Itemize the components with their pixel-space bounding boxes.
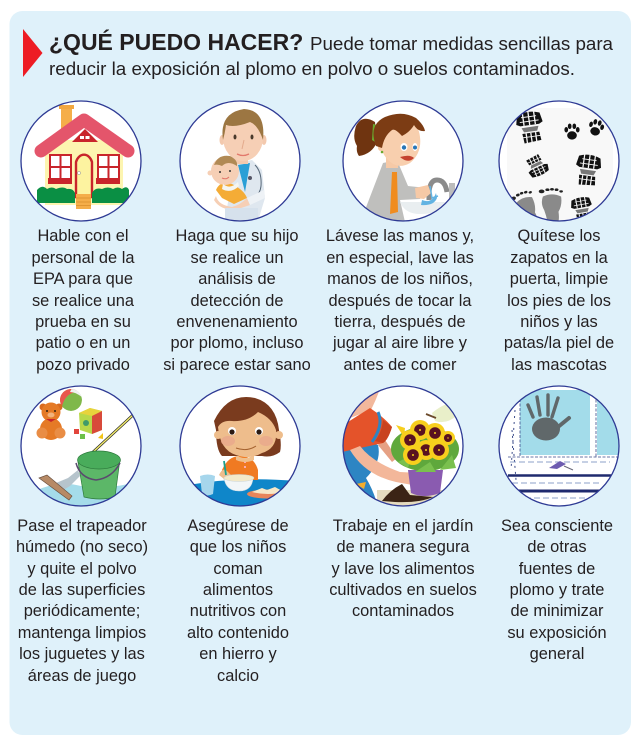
text: col 2 row 1: por plomo, incluso xyxy=(170,334,304,352)
intro text line 2: reducir la exposición al plomo en polvo o suelos contaminados. xyxy=(49,58,575,79)
icon: girl washing hands xyxy=(343,101,463,222)
text: col 3 row 1: jugar al aire libre y xyxy=(332,334,468,352)
text: col 3 row 1: manos de los niños, xyxy=(327,270,473,288)
text: col 4 row 2: su exposición xyxy=(507,624,607,642)
text: col 2 row 1: si parece estar sano xyxy=(163,356,311,374)
text: col 1 row 1: Hable con el xyxy=(37,227,129,245)
text: col 2 row 2: nutritivos con xyxy=(190,602,286,620)
text: col 3 row 2 xyxy=(329,517,477,620)
text: col 4 row 2: fuentes de xyxy=(519,560,595,578)
icon: toys, mop and bucket xyxy=(21,386,141,510)
text: col 1 row 2: periódicamente; xyxy=(24,602,140,620)
text: col 1 row 1 xyxy=(32,227,135,374)
text: col 1 row 1: pozo privado xyxy=(36,356,130,374)
icon: footprints xyxy=(499,101,619,233)
text: col 4 row 1 xyxy=(504,227,614,374)
text: col 4 row 1: Quítese los xyxy=(518,227,600,245)
text: col 3 row 1: en especial, lave las xyxy=(326,249,474,267)
text: col 3 row 1: tierra, después de xyxy=(334,313,466,331)
text: col 1 row 2: de las superficies xyxy=(19,581,145,599)
text: col 2 row 1: se realice un xyxy=(191,249,283,267)
text: col 4 row 1: puerta, limpie xyxy=(510,270,608,288)
heading: ¿QUÉ PUEDO HACER? xyxy=(49,28,303,55)
text: col 2 row 2 xyxy=(187,517,289,685)
text: col 3 row 2: de manera segura xyxy=(336,538,470,556)
text: col 1 row 1: prueba en su xyxy=(35,313,131,331)
text: col 1 row 2: áreas de juego xyxy=(28,667,136,685)
text: col 4 row 1: las mascotas xyxy=(511,356,607,374)
text: col 2 row 2: que los niños xyxy=(190,538,286,556)
text: col 2 row 2: alto contenido xyxy=(187,624,289,642)
icon: doctor with baby xyxy=(180,101,300,222)
text: col 4 row 1: zapatos en la xyxy=(510,249,609,267)
text: col 1 row 1: se realice una xyxy=(32,292,135,310)
text: col 4 row 2: de minimizar xyxy=(511,602,604,620)
text: col 2 row 1: Haga que su hijo xyxy=(175,227,299,245)
text: col 4 row 2: Sea consciente xyxy=(501,517,613,535)
text: col 3 row 1: Lávese las manos y, xyxy=(326,227,474,245)
text: col 1 row 1: personal de la xyxy=(32,249,135,267)
text: col 4 row 2 xyxy=(501,517,613,663)
text: col 2 row 2: Asegúrese de xyxy=(187,517,289,535)
text: col 1 row 2: los juguetes y las xyxy=(19,645,145,663)
intro text line 1: Puede tomar medidas sencillas para xyxy=(310,33,614,54)
icon: red triangle xyxy=(23,29,42,77)
text: col 3 row 2: cultivados en suelos xyxy=(329,581,477,599)
text: col 4 row 1: los pies de los xyxy=(507,292,611,310)
text: col 4 row 2: de otras xyxy=(527,538,587,556)
text: col 4 row 1: niños y las xyxy=(520,313,598,331)
text: col 2 row 2: coman xyxy=(213,560,263,578)
text: col 2 row 1: análisis de xyxy=(198,270,276,288)
text: col 2 row 1: detección de xyxy=(191,292,283,310)
text: col 3 row 1 xyxy=(326,227,474,374)
text: col 1 row 2: mantenga limpios xyxy=(18,624,146,642)
text: col 1 row 2: húmedo (no seco) xyxy=(16,538,148,556)
text: col 4 row 1: patas/la piel de xyxy=(504,334,614,352)
text: col 2 row 1: envenenamiento xyxy=(176,313,298,331)
text: col 3 row 1: antes de comer xyxy=(344,356,457,374)
text: col 1 row 2: Pase el trapeador xyxy=(17,517,147,535)
text: col 1 row 1: EPA para que xyxy=(33,270,133,288)
text: col 2 row 2: en hierro y xyxy=(199,645,278,663)
header xyxy=(23,28,614,79)
icon: handprint on window xyxy=(499,386,623,506)
text: col 1 row 2 xyxy=(16,517,148,685)
text: col 1 row 2: y quite el polvo xyxy=(27,560,137,578)
text: col 3 row 1: después de tocar la xyxy=(328,292,472,310)
text: col 2 row 2: calcio xyxy=(217,667,259,685)
text: col 1 row 1: patio o en un xyxy=(36,334,130,352)
text: col 3 row 2: Trabaje en el jardín xyxy=(333,517,473,535)
text: col 2 row 2: alimentos xyxy=(203,581,273,599)
icon: gardening with flowers xyxy=(340,380,467,510)
text: col 4 row 2: general xyxy=(530,645,584,663)
icon: house xyxy=(21,101,141,221)
icon: girl eating xyxy=(180,386,300,510)
text: col 3 row 2: contaminados xyxy=(352,602,454,620)
text: col 3 row 2: y lave los alimentos xyxy=(331,560,475,578)
text: col 4 row 2: plomo y trate xyxy=(510,581,604,599)
text: col 2 row 1 xyxy=(163,227,311,374)
